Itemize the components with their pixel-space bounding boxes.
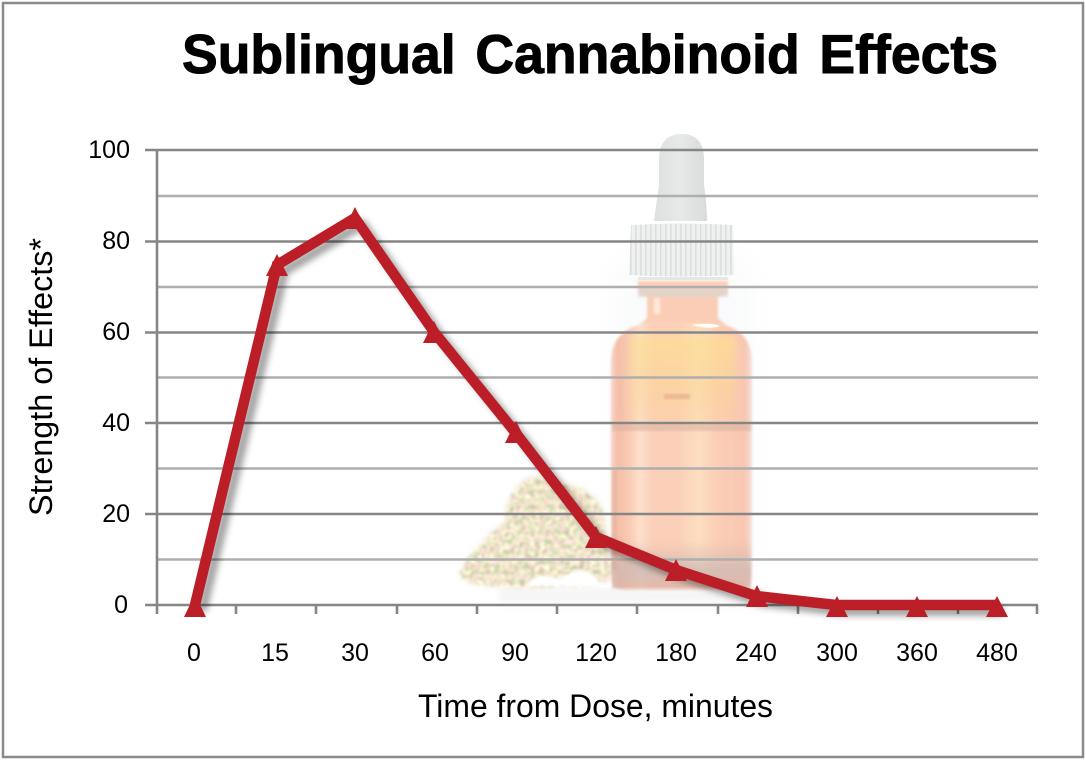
bottle halo [612, 260, 752, 580]
y axis labels [88, 136, 130, 619]
y axis labels: 80 [102, 227, 130, 255]
icon: cannabis bud [460, 477, 612, 588]
x axis labels: 15 [261, 639, 289, 667]
icon: amber bottle body [611, 323, 752, 590]
x axis labels: 90 [501, 639, 529, 667]
icon: dropper bulb [654, 134, 707, 221]
x axis labels: 480 [976, 639, 1018, 667]
data markers [184, 207, 1008, 617]
bottle highlight and base shading [612, 324, 751, 589]
x axis labels: 180 [655, 639, 697, 667]
x axis title: Time from Dose, minutes [418, 688, 773, 724]
background photo: dropper bottle and cannabis bud [460, 134, 770, 616]
chart gridlines [145, 150, 1038, 560]
icon: bottle neck [638, 281, 728, 325]
x axis labels: 120 [575, 639, 617, 667]
y axis labels: 100 [88, 136, 130, 164]
x axis labels: 30 [341, 639, 369, 667]
line series: strength of effects over time [184, 207, 1008, 617]
title: Sublingual Cannabinoid Effects [182, 23, 998, 85]
x axis labels [187, 639, 1018, 667]
y axis labels: 20 [102, 500, 130, 528]
y axis labels: 40 [102, 409, 130, 437]
y axis labels: 0 [114, 591, 128, 619]
x axis labels: 360 [896, 639, 938, 667]
x axis labels: 60 [421, 639, 449, 667]
x axis labels: 300 [816, 639, 858, 667]
y axis labels: 60 [102, 318, 130, 346]
x axis labels: 0 [187, 639, 201, 667]
x axis labels: 240 [735, 639, 777, 667]
icon: ribbed bottle cap [629, 224, 734, 280]
y axis title: Strength of Effects* [23, 238, 59, 516]
line shadow [202, 224, 1003, 611]
chart axes and tick marks [145, 150, 1038, 614]
table reflection [500, 590, 770, 616]
